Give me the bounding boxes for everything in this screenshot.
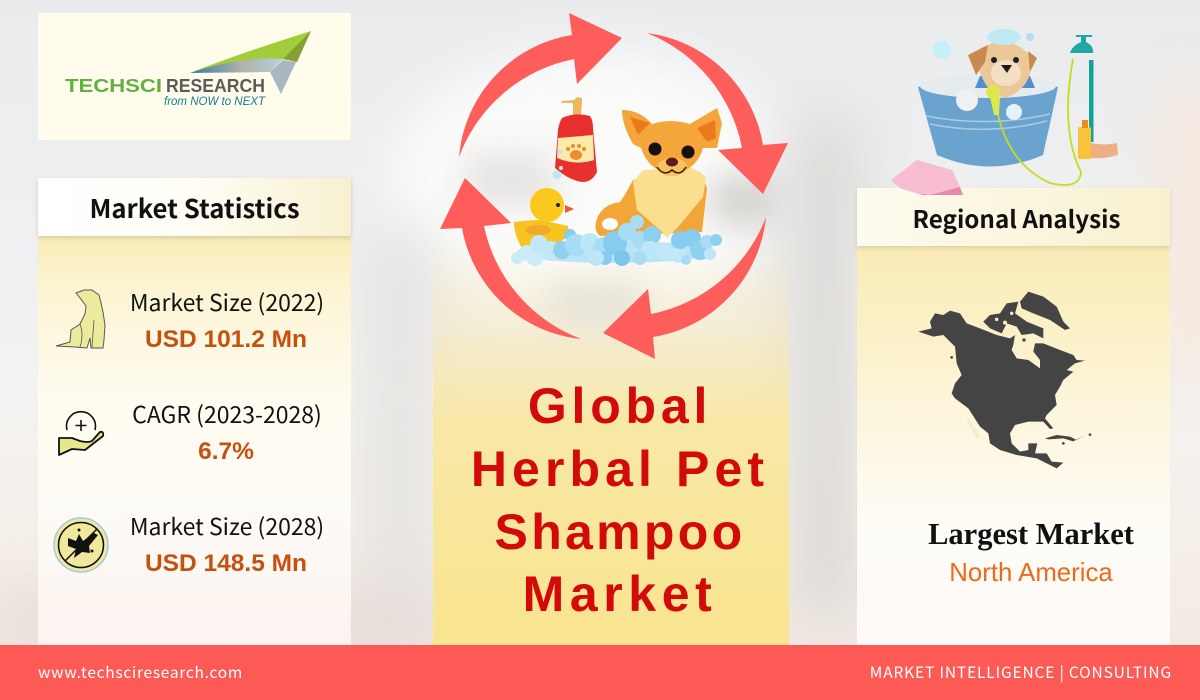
footer bar [0, 645, 1200, 700]
soft shadows behind illustration [456, 144, 788, 324]
title: Shampoo [495, 504, 745, 560]
arrow: top right [647, 33, 788, 194]
icon: tub [918, 74, 1058, 166]
icon: bubbles [933, 33, 1034, 59]
title: Global [528, 378, 712, 434]
panel: regional analysis [857, 188, 1170, 645]
panel: center title backdrop [433, 240, 789, 645]
panel: logo [38, 13, 351, 140]
illustration: dog in tub [891, 29, 1118, 195]
heading: regional analysis: Regional Analysis [913, 200, 1120, 235]
stat: market size 2028 [53, 508, 324, 577]
heading: regional analysis [857, 188, 1170, 246]
icon: soap foam [511, 215, 722, 266]
title: Market [523, 566, 717, 622]
label: Market Size (2028) [130, 508, 324, 542]
arrow: bottom left [440, 178, 581, 339]
icon: dog [596, 108, 722, 238]
logo artwork [65, 31, 311, 108]
text: largest market: Largest Market [928, 517, 1134, 551]
icon: sitting dog [56, 290, 106, 348]
illustration: dog, shampoo and duck [511, 97, 722, 266]
arrow: top left [459, 13, 622, 157]
label: CAGR (2023-2028) [132, 396, 322, 430]
stat: CAGR [58, 396, 322, 465]
icon: bottle and sponge [1078, 120, 1118, 159]
value: 6.7% [198, 438, 254, 465]
icon: hand with plus [58, 410, 104, 456]
panel: market statistics [38, 178, 351, 645]
icon: towel [891, 160, 963, 195]
heading: market statistics: Market Statistics [89, 189, 300, 226]
icon: puppy [968, 29, 1037, 98]
title: Herbal Pet [471, 441, 769, 497]
icon: no insect badge [53, 517, 109, 573]
logo artwork: RESEARCH [166, 76, 265, 96]
stat: market size 2022 [56, 284, 324, 353]
title [471, 378, 769, 622]
icon: shower hose [986, 59, 1081, 185]
footer tagline: MARKET INTELLIGENCE | CONSULTING [870, 661, 1172, 683]
icon: rubber duck [514, 188, 574, 250]
logo artwork: TECHSCI [65, 76, 162, 96]
icon: shampoo bottle [552, 97, 597, 182]
icon: faucet and pipe [1070, 35, 1094, 142]
footer url: www.techsciresearch.com [38, 661, 243, 683]
value: USD 101.2 Mn [145, 326, 307, 353]
label: Market Size (2022) [130, 284, 324, 318]
heading: market statistics [38, 178, 351, 236]
map: North America [918, 292, 1092, 468]
arrow: bottom right [603, 217, 766, 359]
value: USD 148.5 Mn [145, 550, 307, 577]
text: north america: North America [949, 559, 1113, 587]
logo artwork: from NOW to NEXT [164, 94, 267, 108]
